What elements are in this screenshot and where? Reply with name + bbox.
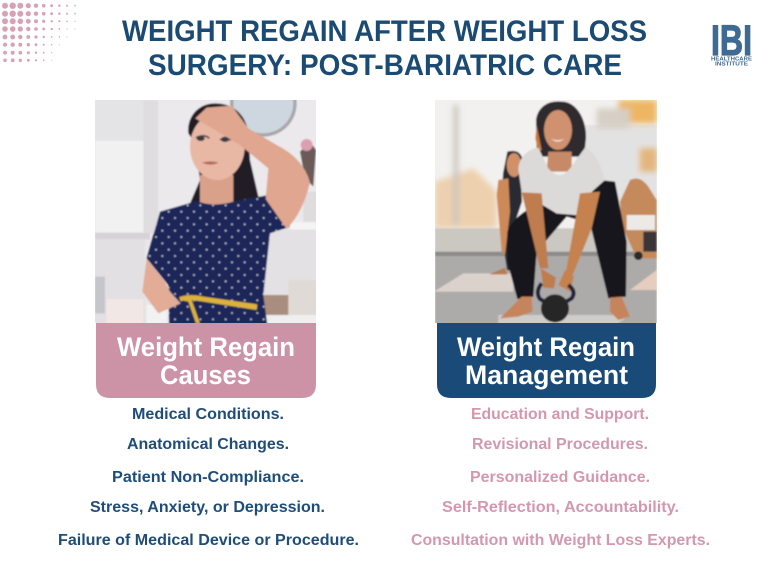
banner: Weight Regain Causes — [96, 323, 316, 398]
list: management: Self-Reflection, Accountability. — [442, 499, 679, 516]
logo: IBI Healthcare Institute: INSTITUTE — [715, 62, 749, 68]
list: causes: Failure of Medical Device or Procedure. — [58, 532, 359, 549]
list: management: Consultation with Weight Loss Experts. — [411, 532, 710, 549]
list: causes — [58, 406, 359, 549]
title: SURGERY: POST-BARIATRIC CARE — [148, 49, 622, 82]
list: management: Personalized Guidance. — [470, 469, 650, 486]
title: WEIGHT REGAIN AFTER WEIGHT LOSS — [122, 15, 647, 48]
banner: Weight Regain Causes: Causes — [160, 360, 251, 390]
banner: Weight Regain Management: Management — [465, 360, 628, 390]
list: causes: Patient Non-Compliance. — [112, 469, 304, 486]
list: causes: Anatomical Changes. — [127, 436, 289, 453]
title — [122, 15, 647, 82]
list: management: Education and Support. — [471, 406, 649, 423]
logo: IBI Healthcare Institute: IBI — [711, 17, 752, 65]
list: management — [411, 406, 710, 549]
banner: Weight Regain Causes: Weight Regain — [117, 332, 295, 362]
logo: IBI Healthcare Institute: HEALTHCARE — [711, 56, 753, 62]
banner: Weight Regain Management — [437, 323, 656, 398]
list: causes: Medical Conditions. — [132, 406, 284, 423]
list: causes: Stress, Anxiety, or Depression. — [90, 499, 325, 516]
photo: woman holding forehead with measuring tape — [95, 100, 316, 323]
decorative halftone dots — [2, 2, 76, 62]
list: management: Revisional Procedures. — [472, 436, 648, 453]
banner: Weight Regain Management: Weight Regain — [457, 332, 635, 362]
photo: woman lifting kettlebell — [435, 100, 657, 324]
